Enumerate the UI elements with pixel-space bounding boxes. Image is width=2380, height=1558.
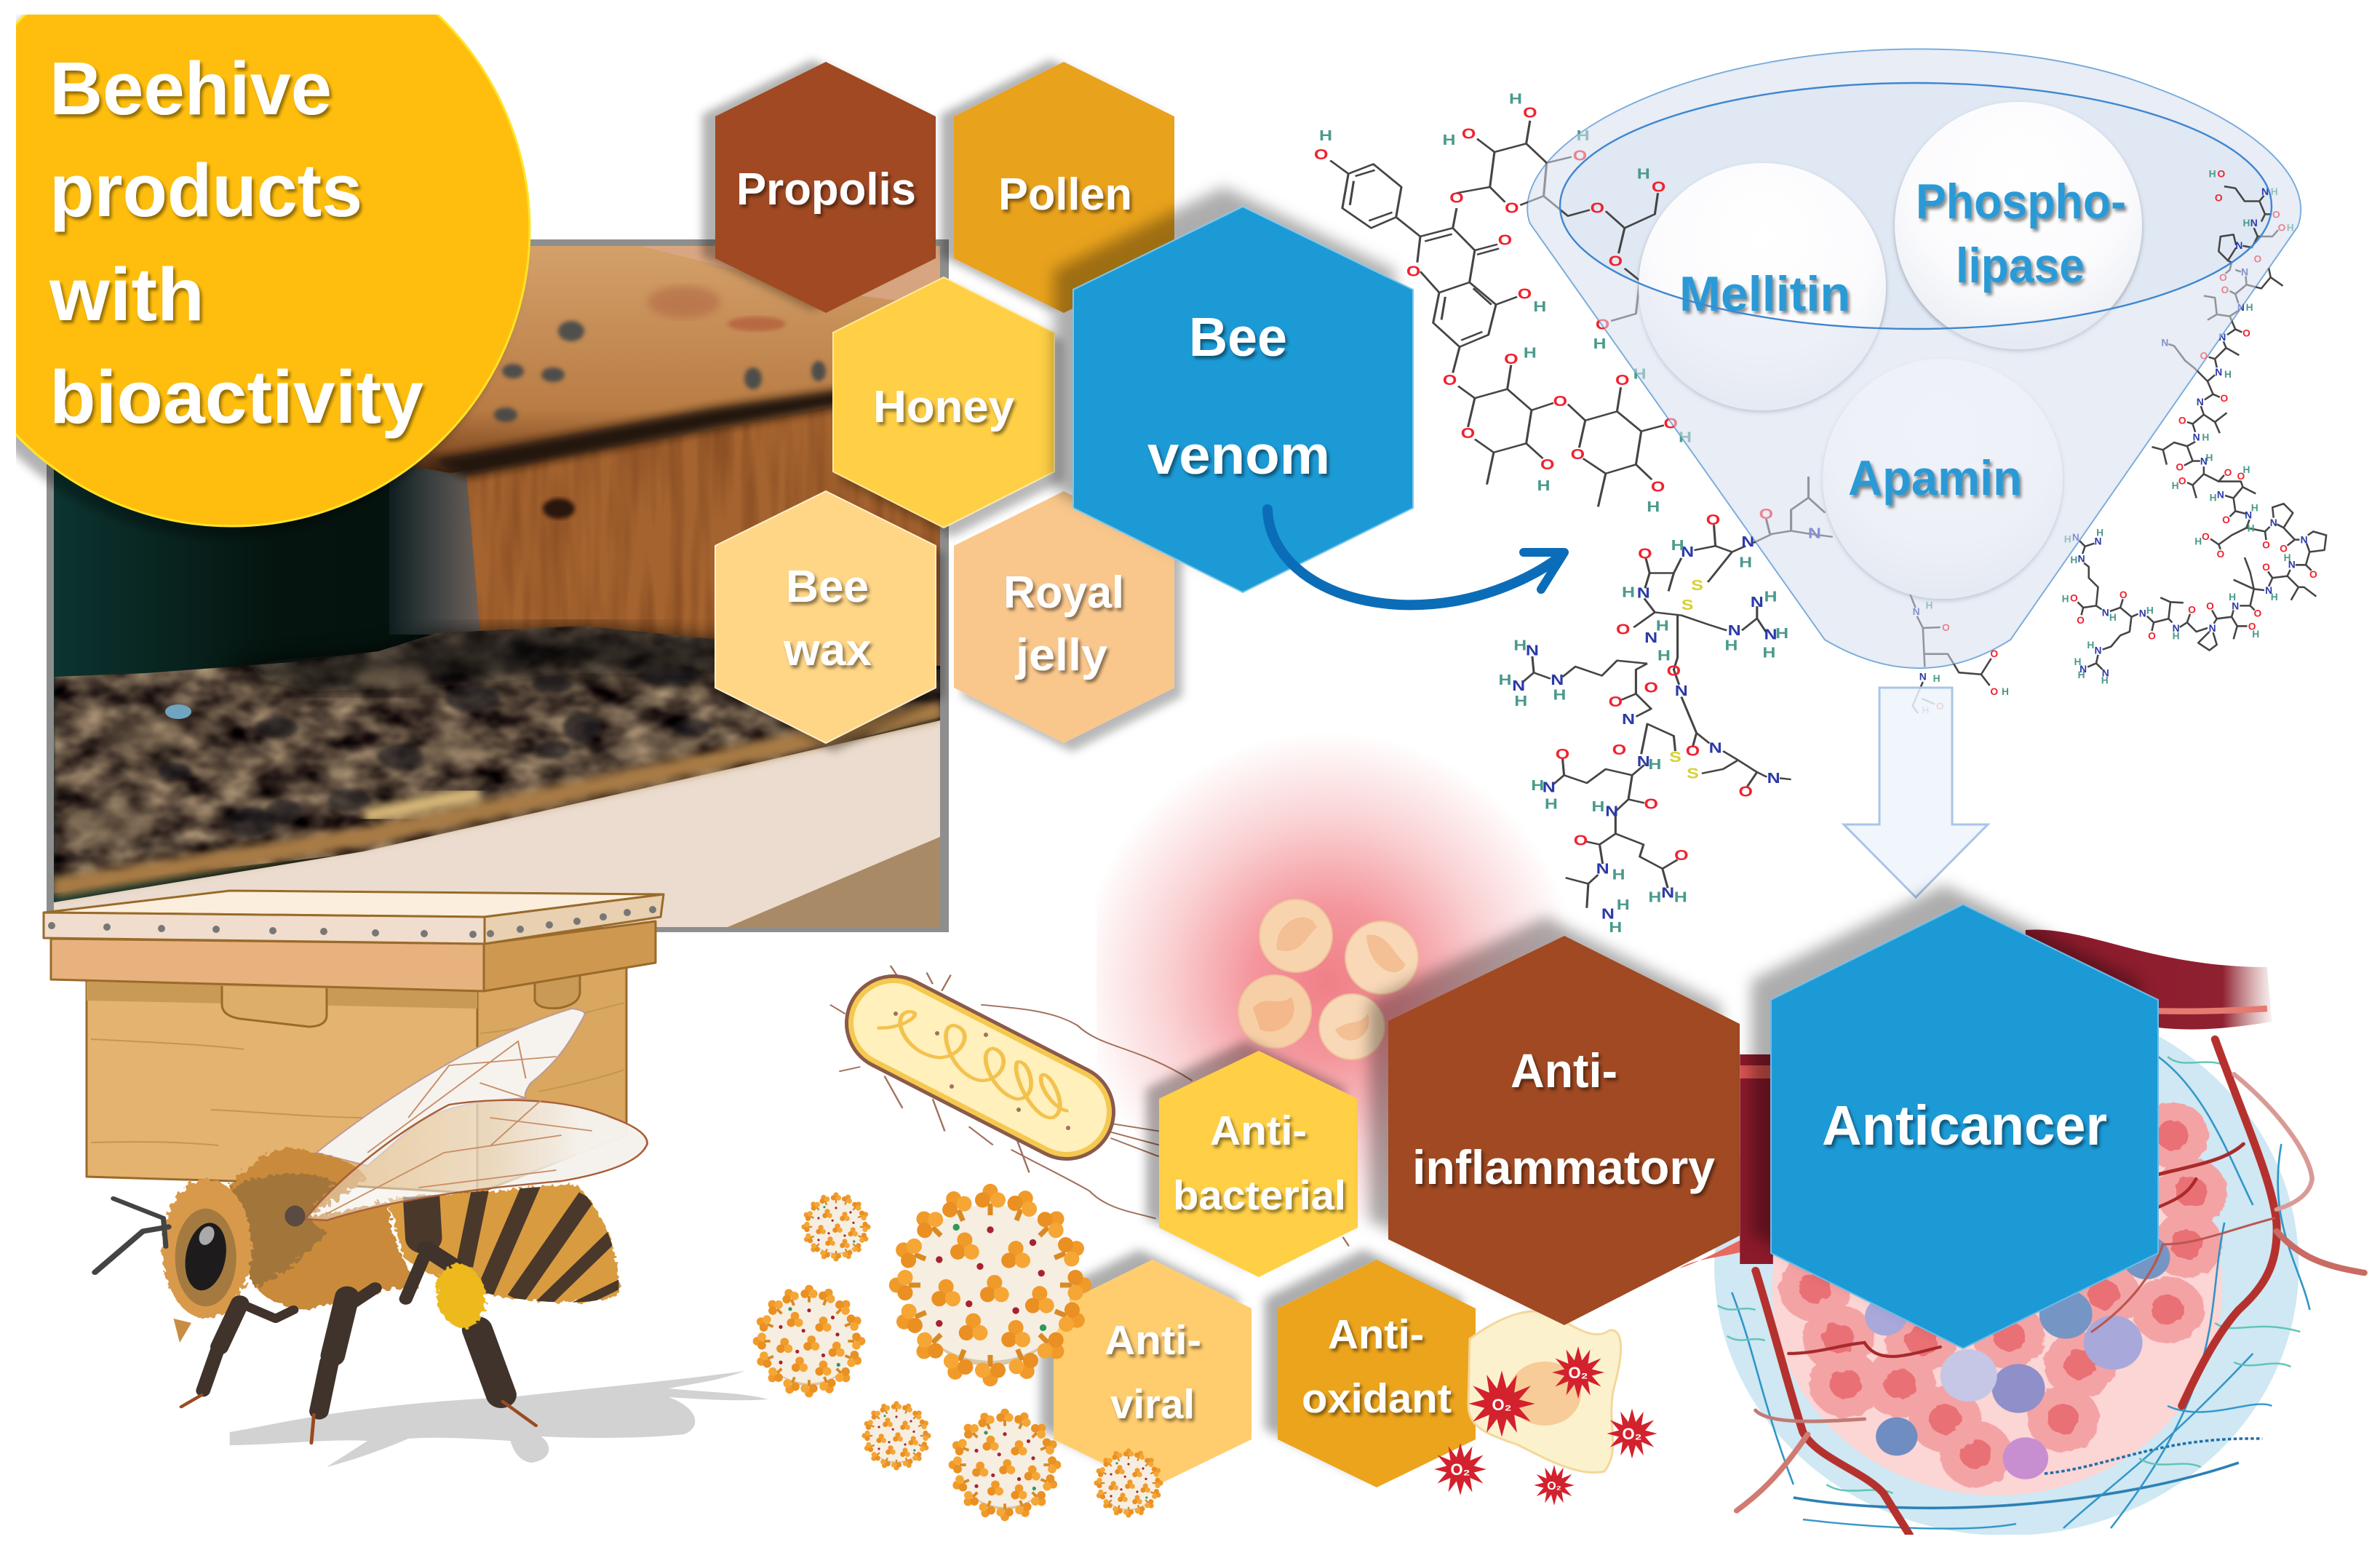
molecule: melittin peptide: O (2216, 549, 2224, 560)
icon: cell with reactive oxygen species: O₂ (1492, 1396, 1511, 1414)
molecule: apamin peptide: O (1616, 621, 1630, 637)
molecule: apamin peptide: H (1531, 777, 1544, 793)
hexagon: Anti-bacterial: Anti- (1210, 1108, 1307, 1154)
molecule: flavonoid glycoside: O (1523, 105, 1537, 121)
inflammation glow (1097, 747, 1554, 1215)
icon: wooden beehive box (44, 891, 664, 1193)
molecule: melittin peptide: O (2222, 514, 2230, 525)
molecule: melittin peptide: H (2271, 186, 2278, 197)
molecule: melittin peptide: O (1942, 622, 1950, 633)
molecule: melittin peptide: N (2237, 302, 2245, 313)
molecule: apamin peptide: H (1739, 555, 1752, 571)
molecule: melittin peptide: N (2265, 585, 2272, 596)
molecule: melittin peptide: O (2176, 461, 2184, 472)
molecule: melittin peptide: O (2262, 562, 2270, 573)
molecule: flavonoid glycoside: H (1533, 298, 1546, 314)
molecule: melittin peptide: N (2209, 623, 2216, 634)
molecule: apamin peptide: N (1526, 643, 1539, 659)
molecule: melittin peptide: N (2139, 608, 2146, 619)
molecule: melittin peptide: H (1933, 673, 1941, 684)
molecule: melittin peptide: N (2250, 218, 2258, 228)
molecule: apamin peptide: N (1637, 585, 1650, 601)
molecule: apamin peptide: O (1612, 742, 1626, 758)
arrow: down to activity (1844, 688, 1988, 897)
hexagon: Bee wax: Bee (786, 562, 869, 612)
molecule: apamin peptide: N (1681, 544, 1694, 560)
molecule: melittin peptide: N (2102, 608, 2109, 619)
molecule: apamin peptide: N (1808, 525, 1821, 541)
title text (49, 47, 423, 439)
molecule: apamin peptide: H (1612, 867, 1625, 883)
molecule: melittin peptide: N (1919, 671, 1927, 682)
molecule: melittin peptide: H (2229, 592, 2236, 603)
molecule: apamin peptide (1498, 477, 1833, 935)
molecule: flavonoid glycoside: H (1637, 166, 1650, 182)
molecule: apamin peptide: H (1545, 796, 1558, 812)
molecule: apamin peptide: O (1686, 743, 1700, 759)
molecule: flavonoid glycoside: O (1651, 479, 1665, 495)
molecule: apamin peptide: O (1667, 663, 1681, 679)
title text: bioactivity (49, 355, 423, 439)
molecule: melittin peptide: O (2206, 600, 2214, 611)
molecule: melittin peptide: N (2095, 536, 2102, 547)
molecule: melittin peptide: H (2202, 432, 2209, 442)
molecule: melittin peptide: N (2232, 600, 2239, 611)
molecule: apamin peptide: N (1551, 672, 1564, 688)
molecule: flavonoid glycoside: O (1615, 372, 1629, 388)
hexagon: Honey (833, 277, 1054, 528)
molecule: melittin peptide: O (2253, 608, 2261, 619)
molecule: melittin peptide: H (2101, 675, 2109, 685)
hexagon: Pollen: Pollen (998, 170, 1132, 220)
hexagon: Bee wax (715, 491, 936, 743)
molecule: melittin peptide: O (2280, 543, 2288, 554)
molecule: apamin peptide: N (1661, 885, 1674, 901)
icon: cell with reactive oxygen species: O₂ (1547, 1480, 1561, 1493)
molecule: melittin peptide: N (2288, 559, 2296, 570)
molecule: melittin peptide: N (2161, 337, 2168, 348)
molecule: melittin peptide: O (2217, 168, 2225, 179)
molecule: melittin peptide: H (2070, 555, 2077, 565)
molecule: flavonoid glycoside: O (1591, 200, 1604, 216)
molecule: melittin peptide: H (2243, 218, 2250, 228)
molecule: apamin peptide: H (1648, 756, 1661, 772)
title text: with (49, 253, 204, 336)
molecule: flavonoid glycoside: H (1524, 345, 1537, 361)
molecule: melittin peptide: N (2095, 645, 2102, 656)
molecule: melittin peptide: O (2188, 605, 2196, 616)
molecule: melittin peptide: H (2224, 369, 2232, 380)
molecule: apamin peptide: O (1759, 506, 1773, 522)
hexagon: Bee venom: venom (1147, 424, 1330, 485)
molecule: melittin peptide: N (2072, 532, 2079, 543)
icon: honey bee with pollen (95, 1009, 768, 1467)
molecule: melittin peptide: O (2309, 569, 2317, 580)
molecule: flavonoid glycoside: O (1498, 232, 1512, 248)
molecule: melittin peptide: O (2200, 350, 2208, 361)
molecule: apamin peptide: H (1553, 687, 1566, 703)
hexagon: Anticancer: Anticancer (1822, 1094, 2107, 1157)
photo: beehive interior (47, 239, 949, 932)
molecule: melittin peptide: H (2146, 605, 2154, 616)
hexagon: Anti-oxidant: Anti- (1328, 1311, 1424, 1358)
molecule: apamin peptide: O (1644, 680, 1658, 696)
molecule: melittin peptide: H (2172, 480, 2179, 491)
molecule: apamin peptide: H (1775, 625, 1788, 641)
molecule: flavonoid glycoside: H (1577, 128, 1590, 144)
molecule: melittin peptide: O (2224, 467, 2232, 478)
molecule: melittin peptide: O (2237, 471, 2245, 482)
molecule: melittin peptide: H (2209, 168, 2216, 179)
hexagon: Bee venom: Bee (1189, 306, 1287, 367)
molecule: melittin peptide: O (2242, 328, 2250, 339)
label: Apamin: Apamin (1848, 450, 2022, 506)
molecule: melittin peptide: H (2074, 656, 2081, 667)
molecule: melittin peptide: O (2148, 630, 2156, 641)
molecule: apamin peptide: H (1514, 693, 1527, 709)
molecule: melittin peptide: O (2202, 531, 2210, 542)
molecule: melittin peptide: H (1925, 600, 1933, 611)
molecule: melittin peptide: H (2062, 593, 2069, 604)
molecule: apamin peptide: N (1751, 594, 1764, 610)
molecule: apamin peptide: H (1724, 637, 1738, 653)
molecule: flavonoid glycoside (1314, 91, 1692, 514)
icon: cell with reactive oxygen species (1434, 1311, 1657, 1506)
molecule: melittin peptide: H (2210, 493, 2217, 504)
molecule: melittin peptide: H (2284, 552, 2291, 563)
hexagon: Anti-inflammatory (1388, 936, 1740, 1325)
molecule: melittin peptide: N (2301, 535, 2308, 546)
molecule: flavonoid glycoside: H (1537, 477, 1551, 493)
molecule: apamin peptide: H (1622, 584, 1635, 600)
molecule: melittin peptide: N (2261, 186, 2269, 197)
molecule: apamin peptide: N (1601, 906, 1615, 922)
molecule: melittin peptide: O (2253, 254, 2261, 265)
molecule: melittin peptide: O (2120, 589, 2128, 600)
molecule: flavonoid glycoside: O (1571, 446, 1585, 462)
molecule: apamin peptide: H (1762, 645, 1775, 661)
molecule: melittin peptide: N (2217, 489, 2224, 500)
molecule: flavonoid glycoside: O (1540, 456, 1554, 472)
icon: cell with reactive oxygen species: O₂ (1569, 1364, 1588, 1382)
hexagon: Anti-viral: viral (1110, 1381, 1195, 1428)
tumor microenvironment illustration (1680, 930, 2364, 1535)
molecule: melittin peptide: O (2219, 272, 2227, 283)
molecule: melittin peptide: H (2087, 640, 2094, 651)
molecule: flavonoid glycoside: O (1449, 190, 1464, 206)
molecule: melittin peptide: O (2070, 592, 2078, 603)
molecule: melittin peptide: N (2270, 517, 2277, 528)
arrow: bee venom to components (1267, 509, 1564, 605)
molecule: melittin peptide: N (2235, 240, 2242, 251)
title text: Beehive (49, 47, 332, 130)
hexagon: Propolis: Propolis (736, 164, 916, 215)
molecule: apamin peptide: H (1648, 889, 1661, 905)
molecule: apamin peptide: H (1674, 889, 1687, 905)
molecule: apamin peptide: H (1656, 618, 1669, 634)
hexagon: Anti-bacterial (1159, 1051, 1358, 1277)
molecule: apamin peptide: N (1728, 622, 1741, 638)
molecule: apamin peptide: N (1709, 740, 1722, 756)
molecule: melittin peptide: N (2102, 667, 2109, 678)
molecule: flavonoid glycoside: O (1518, 286, 1532, 302)
hexagon: Royal jelly: jelly (1015, 630, 1108, 680)
molecule: melittin peptide: O (2248, 621, 2256, 632)
molecule: apamin peptide: O (1638, 546, 1652, 562)
molecule: melittin peptide: H (2173, 630, 2180, 641)
funnel front wall (1527, 49, 2301, 668)
hexagon: Anti-bacterial: bacterial (1173, 1172, 1346, 1219)
molecule: melittin peptide: O (1990, 686, 1998, 697)
molecule: melittin peptide: H (2096, 528, 2104, 538)
molecule: melittin peptide: H (2064, 534, 2071, 545)
molecule: melittin peptide: O (2221, 393, 2229, 404)
icon: virus particles (753, 1184, 1163, 1521)
molecule: melittin peptide: N (2218, 332, 2226, 343)
hexagon: Anti-oxidant (1278, 1260, 1476, 1487)
label: Phospholipase: lipase (1956, 238, 2085, 293)
molecule: apamin peptide: S (1681, 597, 1693, 613)
molecule: flavonoid glycoside: H (1509, 91, 1522, 107)
hexagon: Anti-inflammatory: Anti- (1511, 1044, 1617, 1097)
molecule: apamin peptide: H (1513, 637, 1527, 653)
molecule: apamin peptide: O (1674, 848, 1689, 864)
molecule: melittin peptide: O (2278, 222, 2286, 233)
molecule: melittin peptide: O (2272, 209, 2280, 220)
molecule: melittin peptide: H (2002, 686, 2009, 697)
molecule: flavonoid glycoside: O (1406, 263, 1420, 279)
molecule: melittin peptide: H (2109, 612, 2117, 623)
molecule: flavonoid glycoside: O (1664, 416, 1678, 432)
molecule: apamin peptide: O (1706, 512, 1720, 528)
icon: bacterium (830, 966, 1349, 1246)
molecule: flavonoid glycoside: H (1319, 128, 1332, 144)
molecule: melittin peptide: H (2194, 536, 2202, 547)
molecule: melittin peptide: N (2200, 456, 2208, 467)
molecule: melittin peptide: N (2193, 432, 2200, 442)
molecule: apamin peptide: S (1669, 749, 1681, 765)
label: Mellitin: Mellitin (1679, 266, 1850, 322)
molecule: apamin peptide: O (1574, 832, 1588, 848)
molecule: melittin peptide: N (2245, 510, 2252, 521)
hexagon: Anti-viral (1054, 1260, 1251, 1487)
hexagon: Royal jelly: Royal (1003, 568, 1124, 618)
molecule: melittin peptide: O (2262, 539, 2270, 550)
molecule: flavonoid glycoside: H (1443, 132, 1456, 148)
molecule: apamin peptide: N (1644, 629, 1657, 645)
molecule: flavonoid glycoside: H (1633, 366, 1647, 382)
hexagon: Anti-oxidant: oxidant (1302, 1375, 1452, 1422)
molecule: melittin peptide: H (2243, 464, 2250, 475)
funnel rim (1560, 83, 2272, 329)
title text: products (49, 148, 362, 232)
molecule: melittin peptide: H (2271, 592, 2278, 603)
molecule: melittin peptide: O (2178, 476, 2186, 487)
molecule: melittin peptide: H (2078, 669, 2085, 680)
molecule: flavonoid glycoside: O (1609, 253, 1623, 269)
molecule: apamin peptide: H (1609, 919, 1622, 935)
hexagon: Royal jelly (954, 491, 1174, 743)
label: Phospholipase (1916, 174, 2126, 293)
molecule: apamin peptide: H (1657, 648, 1671, 664)
hexagon: Anticancer (1771, 905, 2158, 1348)
molecule: flavonoid glycoside: O (1504, 351, 1519, 367)
molecule: melittin peptide: H (2248, 522, 2255, 533)
title circle (16, 15, 531, 531)
molecule: melittin peptide: N (1913, 606, 1920, 617)
hexagon: Bee wax: wax (783, 625, 872, 675)
label: Phospholipase: Phospho- (1916, 174, 2126, 229)
molecule: melittin peptide: O (2215, 192, 2223, 203)
hexagon: Pollen (954, 62, 1174, 313)
molecule: melittin peptide: H (2206, 452, 2213, 463)
molecule: melittin peptide: O (2221, 285, 2229, 295)
molecule: apamin peptide: O (1609, 693, 1623, 710)
molecule: apamin peptide: N (1605, 803, 1618, 819)
molecule: apamin peptide: N (1622, 711, 1635, 727)
molecule: apamin peptide: N (1741, 533, 1754, 549)
molecule: melittin peptide: N (2173, 623, 2180, 634)
molecule: flavonoid glycoside: O (1553, 393, 1567, 409)
hexagon: Propolis (715, 62, 936, 313)
molecule: melittin peptide: N (2241, 266, 2248, 277)
molecule: apamin peptide: H (1591, 798, 1604, 814)
molecule: apamin peptide: O (1738, 784, 1753, 800)
molecule: apamin peptide: O (1556, 746, 1569, 762)
funnel body (1527, 49, 2301, 668)
molecule: melittin peptide: O (2077, 615, 2085, 626)
molecule: apamin peptide: H (1764, 589, 1778, 605)
molecule: flavonoid glycoside: H (1593, 336, 1606, 352)
molecule: flavonoid glycoside: H (1647, 498, 1660, 514)
molecule: melittin peptide: O (2178, 415, 2186, 426)
molecule: flavonoid glycoside: O (1596, 317, 1609, 333)
molecule: apamin peptide: O (1644, 796, 1658, 812)
hexagon: Bee venom (1073, 207, 1413, 592)
molecule: melittin peptide: H (2246, 302, 2253, 313)
molecule: flavonoid glycoside: O (1505, 200, 1519, 216)
molecule: melittin peptide: N (2079, 664, 2087, 675)
molecule: apamin peptide: H (1498, 672, 1511, 688)
hexagon: Anti-inflammatory: inflammatory (1412, 1140, 1715, 1194)
molecule: melittin peptide: H (2287, 222, 2294, 233)
molecule: flavonoid glycoside: O (1461, 425, 1475, 441)
white blood cells (1238, 899, 1418, 1060)
molecule: apamin peptide: N (1767, 770, 1780, 786)
molecule: flavonoid glycoside: O (1314, 146, 1328, 162)
icon: cell with reactive oxygen species: O₂ (1623, 1425, 1641, 1443)
molecule: apamin peptide: S (1687, 766, 1699, 782)
molecule: melittin peptide: N (2215, 367, 2222, 378)
molecule: melittin peptide: N (2197, 397, 2204, 408)
molecule: apamin peptide: N (1764, 627, 1778, 643)
icon: cell with reactive oxygen species: O₂ (1451, 1460, 1470, 1479)
molecule: melittin peptide: H (2251, 502, 2258, 513)
molecule: flavonoid glycoside: O (1443, 372, 1457, 388)
hexagon: Honey: Honey (873, 382, 1015, 432)
molecule: melittin peptide (1909, 168, 2326, 715)
molecule: melittin peptide: O (1990, 648, 1998, 659)
molecule: apamin peptide: N (1543, 779, 1556, 795)
molecule: apamin peptide: N (1512, 678, 1525, 694)
molecule: apamin peptide: H (1617, 897, 1630, 913)
component circles (1639, 102, 2142, 599)
molecule: apamin peptide: H (1671, 537, 1684, 553)
molecule: apamin peptide: N (1675, 683, 1688, 699)
molecule: melittin peptide: H (1922, 704, 1929, 715)
molecule: melittin peptide: H (2252, 629, 2259, 640)
molecule: flavonoid glycoside: O (1462, 126, 1476, 142)
hexagon: Anti-viral: Anti- (1105, 1317, 1201, 1364)
molecule: flavonoid glycoside: O (1652, 179, 1665, 195)
molecule: flavonoid glycoside: O (1573, 148, 1587, 164)
molecule: flavonoid glycoside: H (1679, 429, 1692, 445)
molecule: melittin peptide: N (2078, 554, 2085, 565)
molecule: melittin peptide: O (1936, 701, 1944, 712)
molecule: apamin peptide: N (1596, 861, 1609, 877)
molecule: apamin peptide: N (1637, 753, 1650, 769)
molecule: apamin peptide: S (1691, 577, 1703, 593)
